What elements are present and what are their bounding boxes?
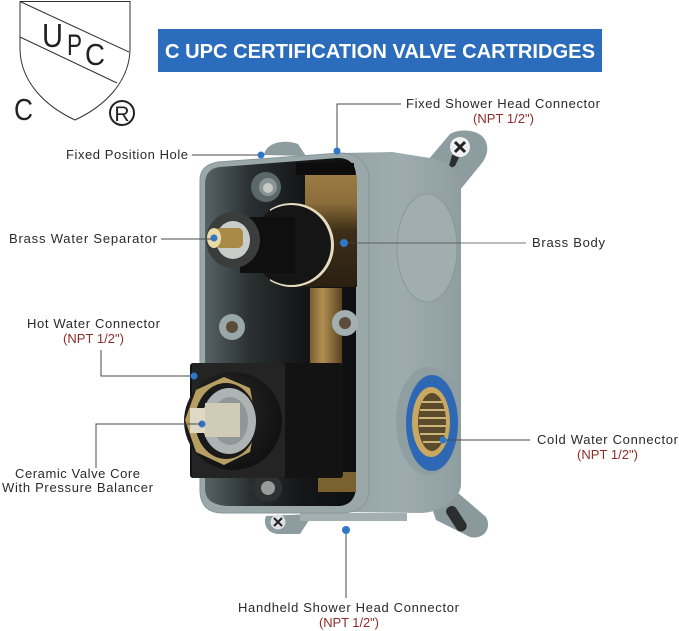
hot water connector block [184,363,343,478]
icon: cUPC shield logo: C [14,92,33,127]
icon: cUPC shield logo: C [85,37,105,72]
callout: Fixed Position Hole: Fixed Position Hole [66,147,188,162]
callout: Ceramic Valve Core: Ceramic Valve Core [15,466,140,481]
lower screw tab [265,514,313,534]
callout: Brass Water Separator: Brass Water Separator [9,231,158,246]
icon: cUPC shield logo: R [114,103,130,126]
upper mounting screw [251,172,281,202]
callout: Hot Water Connector [27,316,198,380]
brass body column [305,175,357,492]
blank knockout circle [397,194,457,302]
callout: Hot Water Connector: Hot Water Connector [27,316,161,331]
callout: Handheld Shower Head Connector: Handheld Shower Head Connector [238,600,460,615]
callout: Handheld Shower Head Connector: (NPT 1/2") [319,615,379,630]
lower mounting ear with slot [428,486,488,537]
icon: cUPC shield logo: P [67,29,82,62]
lower mounting posts [219,310,358,340]
brass water separator [206,203,334,287]
callout: Ceramic Valve Core: With Pressure Balancer [2,480,154,495]
callout: Fixed Shower Head Connector: (NPT 1/2") [473,111,534,126]
bottom fitting lip [300,513,407,521]
ceramic valve core [185,377,257,465]
callout: Brass Body: Brass Body [532,235,606,250]
icon: cUPC shield logo: U [42,17,63,54]
box side wall [340,152,461,513]
title banner [158,29,602,72]
callout: Brass Body [340,235,606,250]
callout: Hot Water Connector: (NPT 1/2") [63,331,124,346]
upper tab [264,142,306,156]
callout: Cold Water Connector [440,432,679,462]
title banner: C UPC CERTIFICATION VALVE CARTRIDGES [165,41,595,63]
callout: Fixed Shower Head Connector: Fixed Shower Head Connector [406,96,601,111]
callout: Fixed Shower Head Connector [334,96,601,154]
dark top shadow [296,163,354,175]
box front frame [200,153,369,513]
callout: Cold Water Connector: Cold Water Connector [537,432,679,447]
callout: Handheld Shower Head Connector [238,526,460,630]
box interior [205,158,356,506]
callout: Ceramic Valve Core [2,424,202,495]
cold water connector [396,367,460,475]
icon: cUPC shield logo [14,2,134,127]
top mounting ear with screw [428,130,487,190]
lower screw [254,474,282,502]
callout: Cold Water Connector: (NPT 1/2") [577,447,638,462]
valve box photo [184,130,488,537]
callout: Fixed Position Hole [66,147,264,162]
